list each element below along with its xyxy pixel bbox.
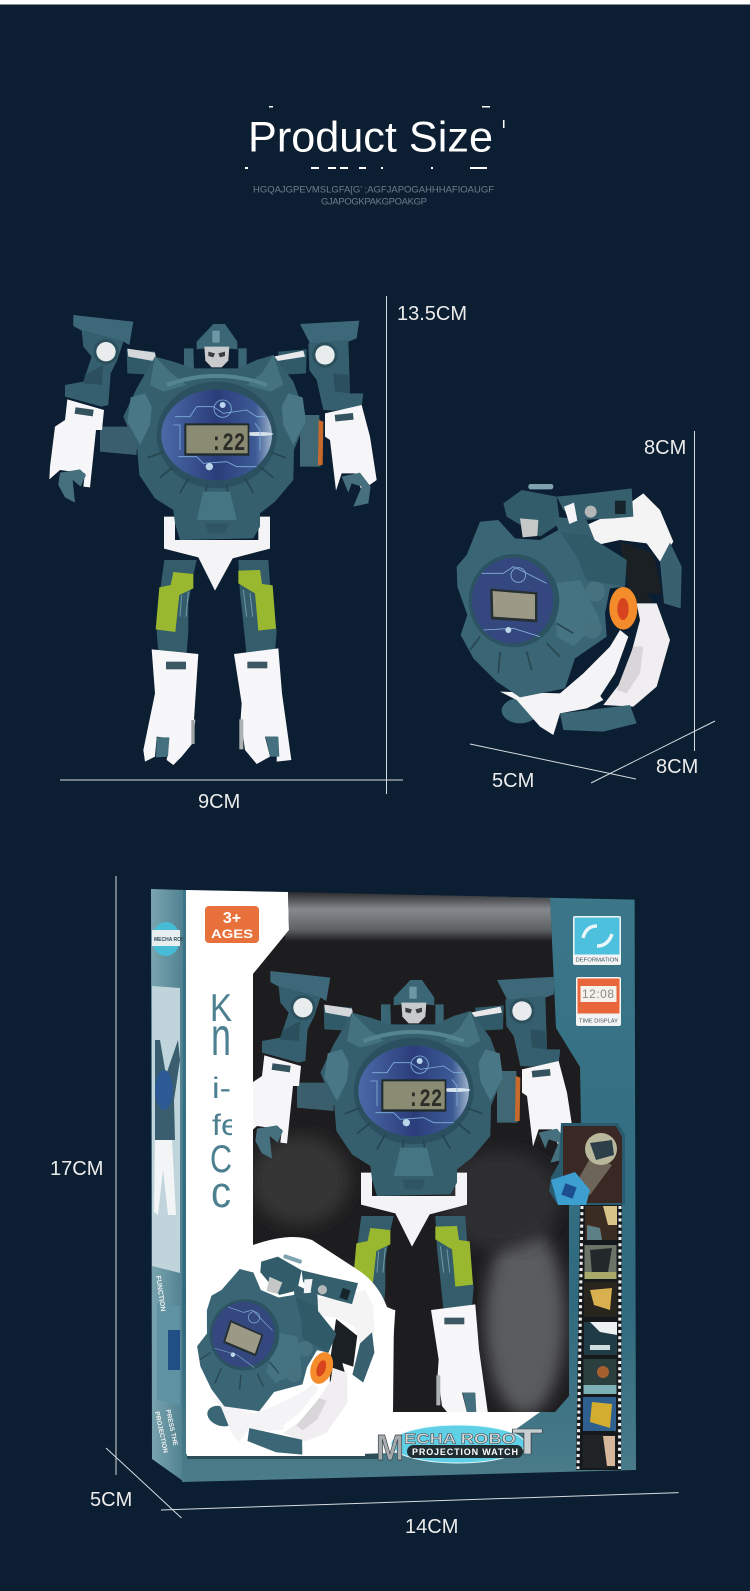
vertical brand text: K (210, 987, 232, 1030)
top white strip (0, 0, 750, 4)
label: watch 8CM height: 8CM (644, 437, 686, 459)
vertical brand text: c (211, 1168, 231, 1217)
heading: Product Size: Product Size (248, 114, 493, 162)
title block (245, 106, 504, 208)
age badge (205, 906, 259, 943)
dimension: watch lines (470, 431, 715, 783)
robot figure (49, 315, 377, 765)
dimension: box lines (106, 876, 679, 1518)
box front (182, 890, 636, 1482)
box side panel: MECHA ROBOT (154, 937, 192, 943)
product logo: PROJECTION WATCH (412, 1447, 518, 1457)
title fragment marks (245, 106, 504, 169)
product box (151, 889, 636, 1482)
age badge: 3+ (223, 910, 241, 927)
strip beneath white panel (187, 1453, 380, 1459)
vertical brand text: fe (212, 1109, 239, 1142)
icon: time display: 12:08 (582, 987, 614, 1001)
vertical brand text: i- (212, 1072, 231, 1105)
box side panel: PROJECTION (153, 1411, 169, 1454)
vertical brand text: C (210, 1138, 232, 1181)
label: 13.5CM: 13.5CM (397, 303, 467, 325)
icon: time display (576, 977, 621, 1026)
robot in window (246, 971, 574, 1421)
label: 14CM: 14CM (405, 1516, 458, 1538)
age badge: AGES (211, 929, 253, 941)
box side panel (151, 889, 192, 1481)
subtitle (253, 184, 494, 208)
film strip (576, 1205, 622, 1470)
box side panel: FUNCTION (154, 1275, 166, 1312)
product logo: ECHA ROBO (404, 1430, 516, 1448)
label: 9CM: 9CM (198, 791, 240, 813)
product logo: T (512, 1421, 543, 1462)
projection panel (549, 1123, 625, 1205)
white left panel (186, 890, 540, 1454)
icon: deformation: DEFORMATION (576, 958, 618, 964)
icon: time display: TIME DISPLAY (579, 1018, 618, 1024)
watch on box (169, 1236, 395, 1474)
label: box 5CM: 5CM (90, 1489, 132, 1511)
product logo: M (376, 1427, 404, 1468)
display window (246, 892, 581, 1421)
vertical brand text (212, 994, 232, 1208)
label: watch 5CM: 5CM (492, 770, 534, 792)
watch form figure (457, 484, 682, 735)
dimension: robot height and width lines (60, 296, 403, 794)
subtitle: HGQAJGPEVMSLGFA[G’ ;AGFJAPOGAHHHAFIOAUGF (253, 184, 494, 196)
white corner curve behind watch (187, 1237, 394, 1456)
subtitle: GJAPOGKPAKGPOAKGP (321, 196, 427, 208)
vertical brand text: n (211, 1007, 231, 1067)
product logo (376, 1421, 543, 1468)
box side panel: PRESS THE (164, 1409, 179, 1447)
white panel bottom strip (360, 1412, 540, 1454)
label: watch 8CM depth: 8CM (656, 756, 698, 778)
label: 17CM: 17CM (50, 1158, 103, 1180)
icon: deformation (573, 916, 621, 965)
